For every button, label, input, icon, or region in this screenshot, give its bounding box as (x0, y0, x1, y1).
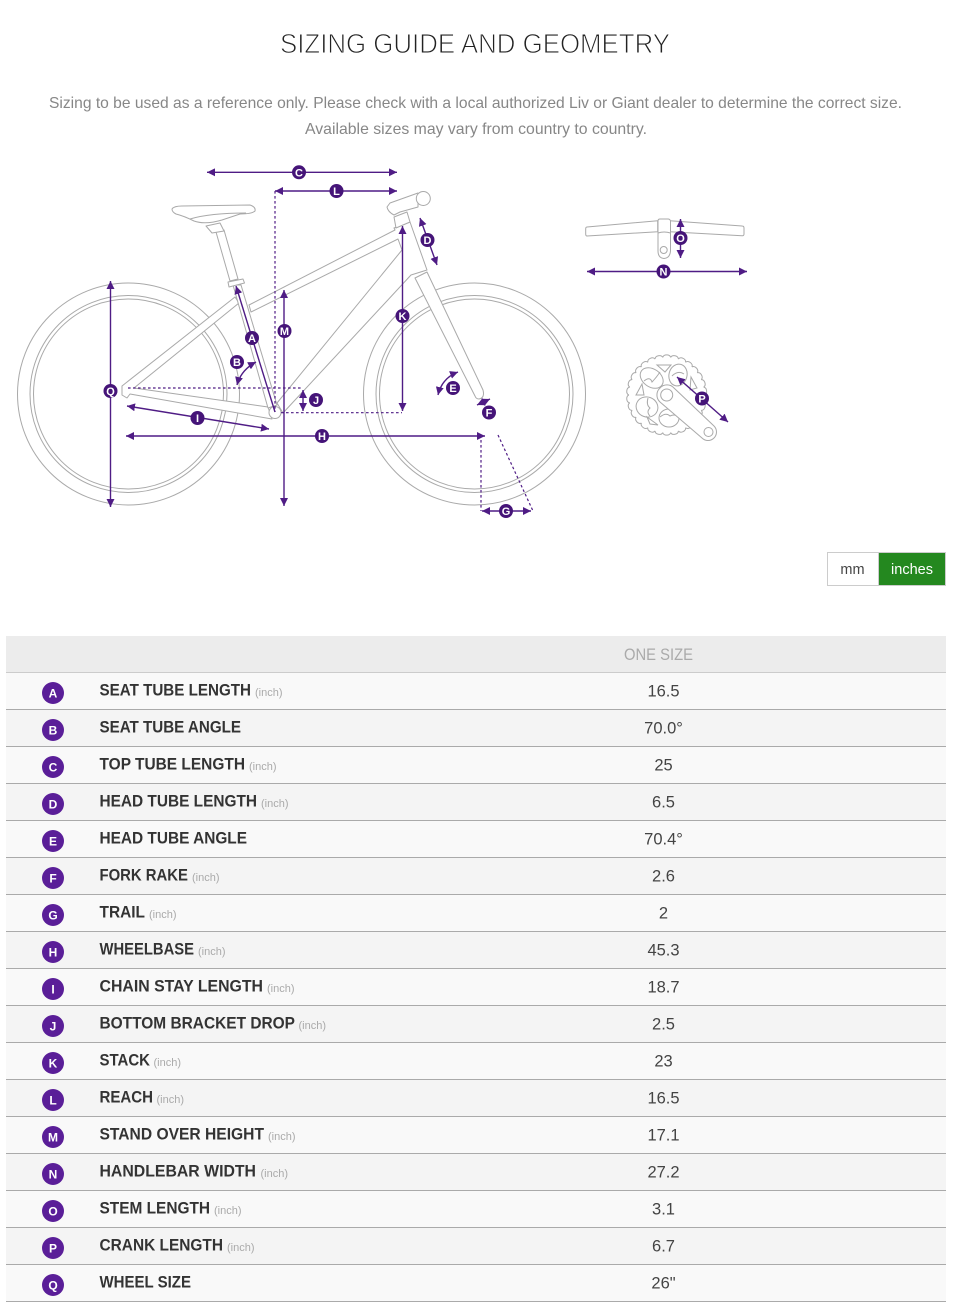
row D: D (49, 798, 58, 812)
row P: P (49, 1242, 57, 1256)
diagram badges: M (280, 326, 289, 338)
pedal eye (704, 428, 713, 436)
row G (6, 895, 946, 932)
row K: (inch) (154, 1057, 181, 1069)
diagram badges: J (313, 395, 319, 407)
row B: SEAT TUBE ANGLE (100, 718, 241, 736)
row M: (inch) (268, 1131, 296, 1143)
row G: TRAIL (100, 904, 145, 922)
row P: CRANK LENGTH (100, 1236, 223, 1254)
row N: 27.2 (647, 1164, 680, 1182)
row C: TOP TUBE LENGTH (100, 756, 245, 774)
diagram badges: C (295, 167, 303, 179)
crankset diagram (626, 355, 728, 440)
row M: M (48, 1130, 58, 1144)
row I: 18.7 (647, 978, 680, 996)
row O: (inch) (214, 1205, 242, 1217)
row P: 6.7 (652, 1238, 675, 1256)
handlebar right side (670, 221, 744, 236)
row Q (6, 1265, 946, 1302)
row A: SEAT TUBE LENGTH (100, 682, 251, 700)
row O (6, 1191, 946, 1228)
row C: C (49, 760, 58, 774)
row N: HANDLEBAR WIDTH (100, 1162, 256, 1180)
row K: 23 (654, 1052, 673, 1070)
row J: J (50, 1020, 56, 1034)
diagram badges: Q (106, 386, 115, 398)
stem top view (658, 219, 670, 258)
table header (6, 636, 946, 673)
row B: B (49, 724, 58, 738)
row K: STACK (100, 1052, 150, 1070)
row F: F (49, 872, 57, 886)
crank length arrow P (677, 377, 728, 422)
row J (6, 1006, 946, 1043)
row B: 70.0° (644, 720, 683, 738)
crank axle (661, 389, 673, 401)
inches button: inches (891, 562, 933, 578)
diagram badges: B (233, 357, 241, 369)
row O: STEM LENGTH (100, 1200, 210, 1218)
row J: (inch) (298, 1020, 326, 1032)
row F: (inch) (192, 872, 220, 884)
badge N: N (660, 266, 668, 278)
bike frame (122, 222, 484, 419)
row E: 70.4° (644, 830, 683, 848)
diagram badges: D (424, 235, 432, 247)
title: SIZING GUIDE AND GEOMETRY (280, 28, 670, 59)
row J: BOTTOM BRACKET DROP (100, 1014, 295, 1032)
intro text (49, 95, 902, 138)
row H: WHEELBASE (100, 940, 194, 958)
row A: 16.5 (647, 682, 680, 700)
diagram badges: F (486, 408, 493, 420)
diagram badges: H (318, 431, 326, 443)
row A (6, 673, 946, 710)
row N: (inch) (260, 1168, 288, 1180)
dimension lines (110, 172, 533, 511)
row E: HEAD TUBE ANGLE (100, 830, 247, 848)
diagram badges: L (333, 186, 340, 198)
badge P: P (698, 394, 706, 406)
diagram badges: K (399, 311, 407, 323)
badge O (674, 231, 688, 245)
row O: O (48, 1204, 58, 1218)
row K: K (49, 1056, 58, 1070)
row Q: 26" (651, 1274, 676, 1292)
row F: FORK RAKE (100, 866, 188, 884)
row L: 16.5 (647, 1090, 680, 1108)
chainring cutouts (633, 362, 697, 427)
row L: L (49, 1094, 57, 1108)
diagram badges: G (502, 506, 510, 518)
row G: (inch) (149, 909, 177, 921)
row H (6, 932, 946, 969)
intro text: Sizing to be used as a reference only. Please check with a local authorized Liv or Giant dealer to determine the correct size. (49, 95, 902, 112)
row C: (inch) (249, 761, 277, 773)
row I: CHAIN STAY LENGTH (100, 978, 263, 996)
stem bolt (660, 246, 667, 254)
mm button: mm (840, 562, 865, 578)
row C: 25 (654, 756, 673, 774)
rear wheel (18, 283, 240, 505)
row I (6, 969, 946, 1006)
row I: I (51, 982, 55, 996)
row L: (inch) (156, 1094, 184, 1106)
chainring teeth (626, 355, 707, 435)
row B (6, 710, 946, 747)
diagram badges: E (449, 383, 457, 395)
row M: 17.1 (647, 1126, 680, 1144)
table header: ONE SIZE (624, 646, 693, 664)
saddle (172, 205, 255, 223)
row K (6, 1043, 946, 1080)
bike geometry diagram (18, 165, 586, 518)
handlebar diagram (586, 219, 747, 278)
row I: (inch) (267, 983, 295, 995)
row H: 45.3 (647, 942, 680, 960)
stem clamp line (658, 232, 670, 233)
row N: N (49, 1168, 57, 1182)
stem length arrow O (680, 219, 682, 258)
row H: (inch) (198, 946, 226, 958)
row Q: Q (48, 1278, 58, 1292)
diagram badges: I (196, 413, 199, 425)
row M: STAND OVER HEIGHT (100, 1126, 264, 1144)
unit toggle (828, 552, 946, 586)
row O: 3.1 (652, 1200, 675, 1218)
row D: 6.5 (652, 794, 675, 812)
intro text: Available sizes may vary from country to country. (305, 121, 647, 138)
badge O: O (676, 233, 685, 245)
front wheel (364, 283, 586, 505)
row L (6, 1080, 946, 1117)
row G: 2 (659, 904, 668, 922)
handlebar (586, 221, 658, 236)
row D (6, 784, 946, 821)
row M (6, 1117, 946, 1154)
row G: G (48, 908, 58, 922)
stem and headset (387, 192, 430, 228)
row E: E (49, 834, 57, 848)
row F (6, 858, 946, 895)
row P: (inch) (227, 1242, 255, 1254)
badge N (656, 264, 670, 278)
row J: 2.5 (652, 1016, 675, 1034)
crank arm (657, 385, 716, 440)
handlebar width arrow N (587, 270, 747, 272)
geometry table (6, 636, 946, 1302)
row C (6, 747, 946, 784)
row H: H (49, 946, 57, 960)
row Q: WHEEL SIZE (100, 1274, 191, 1292)
row A: A (49, 686, 58, 700)
row D: HEAD TUBE LENGTH (100, 792, 257, 810)
diagram badges: A (248, 333, 256, 345)
row N (6, 1154, 946, 1191)
row F: 2.6 (652, 868, 675, 886)
row A: (inch) (255, 687, 283, 699)
row D: (inch) (261, 798, 289, 810)
row L: REACH (100, 1088, 153, 1106)
row P (6, 1228, 946, 1265)
row E (6, 821, 946, 858)
diagram badges (104, 165, 513, 518)
